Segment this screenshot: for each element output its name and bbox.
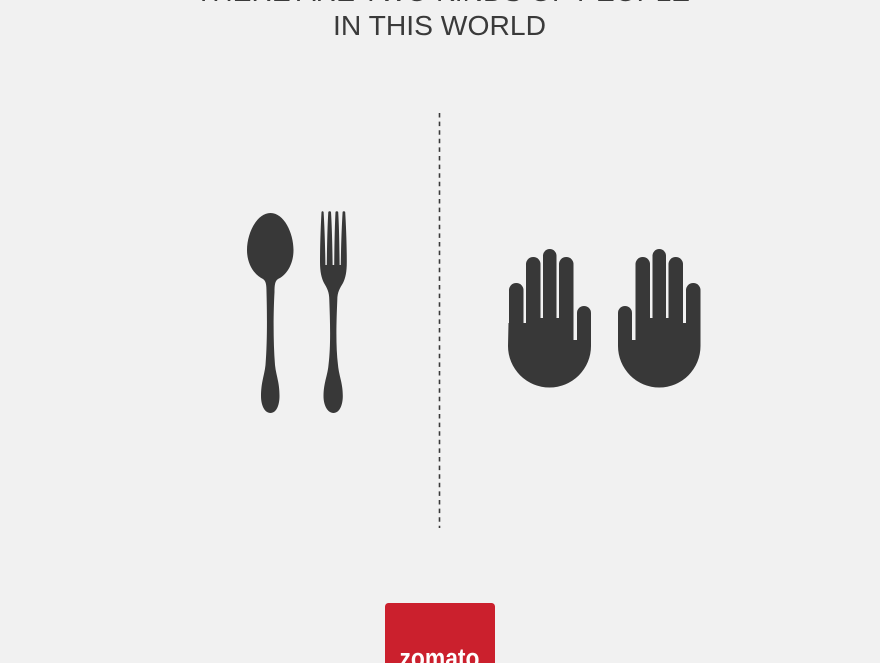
title [195, 0, 690, 41]
icon: right hand [618, 249, 700, 387]
title: IN THIS WORLD [333, 10, 546, 41]
logo: zomato [385, 603, 495, 663]
icon: fork [320, 211, 347, 413]
icon: left hand [508, 249, 591, 387]
icon: spoon [247, 213, 294, 413]
divider: dashed line [438, 113, 440, 528]
